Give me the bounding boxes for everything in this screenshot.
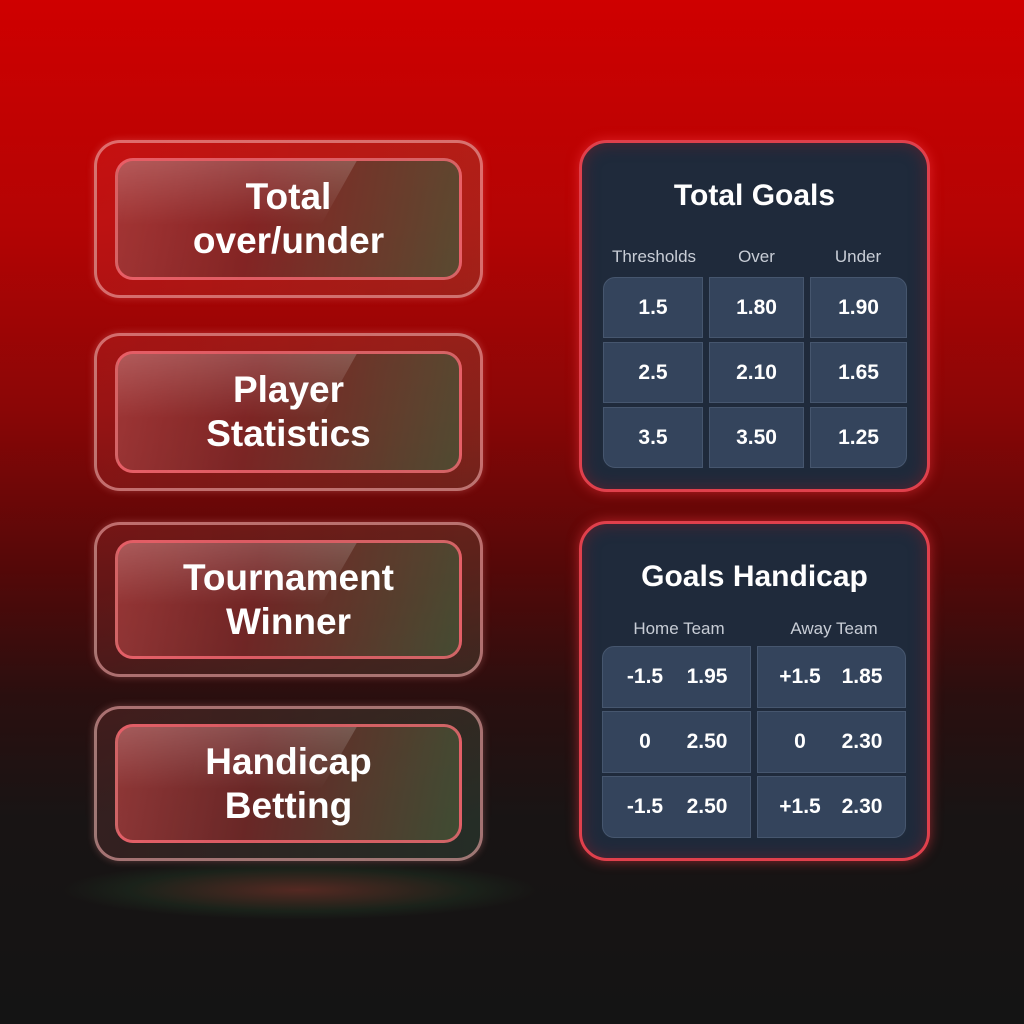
heading: Goals Handicap: [641, 560, 868, 593]
odds grid: 3.5: [638, 426, 668, 448]
column headers: Over: [738, 247, 775, 266]
odds grid: 2.5: [638, 360, 668, 384]
column headers: Under: [835, 247, 881, 266]
button: player statistics: [94, 333, 483, 491]
column headers: [633, 619, 878, 638]
odds grid: 1.25: [838, 426, 879, 448]
handicap grid: 2.50: [687, 730, 727, 753]
handicap grid: 1.95: [687, 665, 727, 688]
button: tournament winner: Tournament: [183, 556, 394, 598]
button: total over/under: Total: [246, 176, 331, 217]
odds grid: 1.65: [838, 360, 879, 384]
handicap grid: [602, 646, 906, 838]
odds grid: 1.5: [638, 296, 668, 318]
handicap grid: -1.5: [627, 665, 663, 688]
odds grid: 1.90: [838, 296, 879, 318]
handicap grid: -1.5: [627, 795, 663, 818]
handicap grid: 2.50: [687, 795, 727, 818]
button: tournament winner: Winner: [226, 600, 351, 642]
handicap grid: +1.5: [779, 665, 821, 688]
button: total over/under: [94, 140, 483, 298]
button: handicap betting: Betting: [225, 784, 352, 826]
handicap grid: 0: [794, 730, 806, 753]
button: handicap betting: [94, 706, 483, 861]
panel: goals handicap: [579, 521, 930, 861]
handicap grid: 2.30: [842, 730, 882, 753]
odds grid: [603, 277, 907, 468]
handicap grid: 1.85: [842, 665, 882, 688]
glow reflection: [60, 860, 540, 920]
handicap grid: +1.5: [779, 795, 821, 818]
panel: total goals: [579, 140, 930, 492]
odds grid: 1.80: [736, 296, 777, 318]
heading: Total Goals: [674, 179, 835, 212]
button: player statistics: Player: [233, 369, 344, 410]
column headers: Home Team: [633, 619, 725, 638]
button: total over/under: over/under: [193, 220, 384, 261]
odds grid: 2.10: [736, 360, 777, 384]
button: handicap betting: Handicap: [205, 740, 372, 782]
odds grid: 3.50: [736, 426, 777, 448]
handicap grid: 0: [639, 730, 651, 753]
handicap grid: 2.30: [842, 795, 882, 818]
column headers: Away Team: [790, 619, 878, 638]
column headers: Thresholds: [612, 247, 696, 266]
button: tournament winner: [94, 522, 483, 677]
button: player statistics: Statistics: [206, 413, 371, 454]
column headers: [612, 247, 881, 266]
